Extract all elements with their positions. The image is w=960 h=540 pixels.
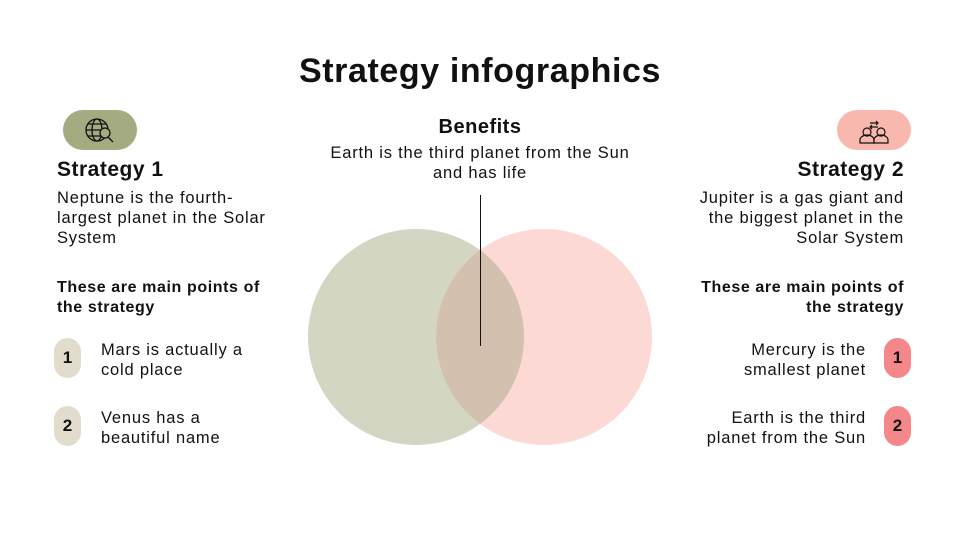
point 2 right: 2	[893, 416, 902, 435]
point 2 right: planet from the Sun	[707, 429, 866, 447]
panel: strategy 1: largest planet in the Solar	[57, 209, 266, 227]
benefits text block: Earth is the third planet from the Sun	[330, 144, 630, 162]
benefits text block: Benefits	[439, 116, 521, 138]
pointer line	[480, 195, 482, 346]
panel: strategy 1: These are main points of	[57, 279, 260, 296]
panel: strategy 2: Solar System	[796, 229, 904, 247]
point 1 left: cold place	[101, 361, 183, 379]
point 1 left: Mars is actually a	[101, 341, 243, 359]
icon: globe pill	[63, 110, 137, 150]
panel: strategy 1: Strategy 1	[57, 158, 164, 181]
benefits text block	[330, 116, 630, 182]
point 2 left	[54, 406, 220, 447]
circle: left	[308, 229, 524, 445]
point 2 right	[707, 406, 911, 447]
panel: strategy 1: the strategy	[57, 299, 155, 316]
panel: strategy 2	[700, 158, 904, 316]
overlap	[436, 250, 524, 424]
icon: people pill	[837, 110, 911, 150]
title: Strategy infographics	[299, 52, 661, 90]
panel: strategy 1: System	[57, 229, 117, 247]
point 1 right: Mercury is the	[751, 341, 866, 359]
panel: strategy 2: the biggest planet in the	[709, 209, 904, 227]
panel: strategy 2: Jupiter is a gas giant and	[700, 189, 904, 207]
point 1 left	[54, 338, 243, 379]
point 1 left: 1	[63, 348, 72, 367]
panel: strategy 1: Neptune is the fourth-	[57, 189, 233, 207]
benefits text block: and has life	[433, 164, 527, 182]
point 2 left: 2	[63, 416, 72, 435]
point 1 right: smallest planet	[744, 361, 866, 379]
point 2 left: beautiful name	[101, 429, 220, 447]
panel: strategy 1	[57, 158, 266, 316]
point 2 left: Venus has a	[101, 409, 201, 427]
panel: strategy 2: the strategy	[806, 299, 904, 316]
circle: right	[436, 229, 652, 445]
panel: strategy 2: Strategy 2	[797, 158, 904, 181]
point 1 right: 1	[893, 348, 902, 367]
panel: strategy 2: These are main points of	[701, 279, 904, 296]
point 1 right	[744, 338, 911, 379]
point 2 right: Earth is the third	[731, 409, 866, 427]
